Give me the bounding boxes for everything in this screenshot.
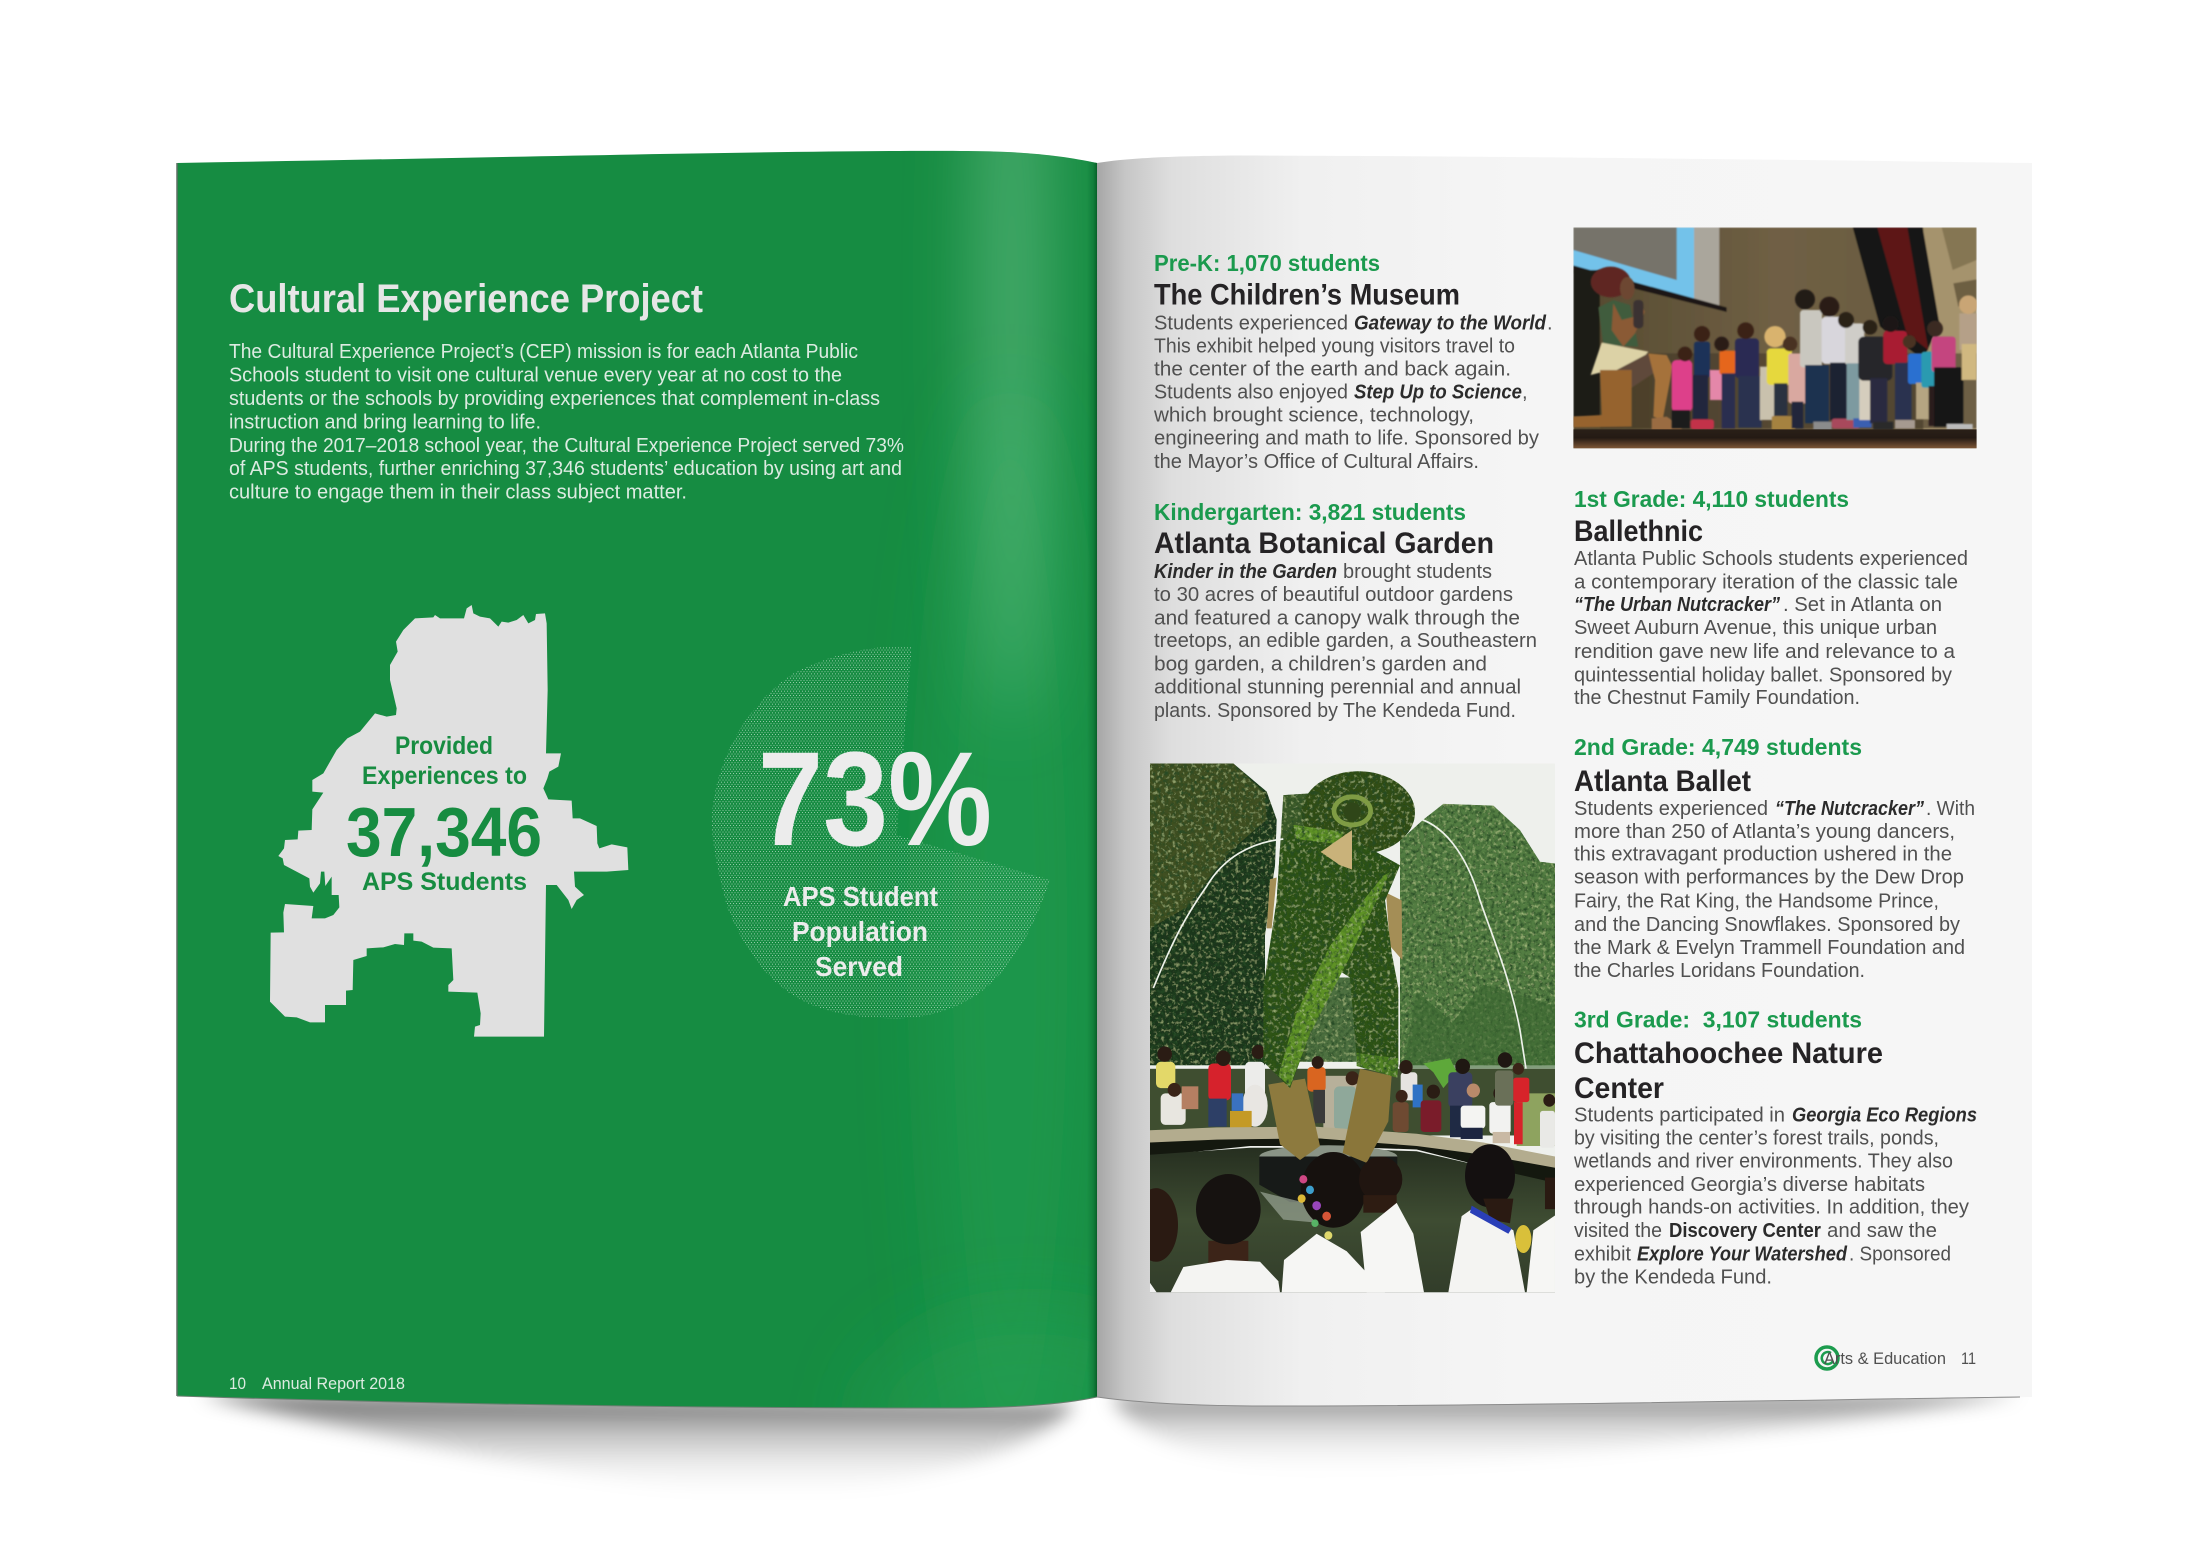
text block: mission intro: During the 2017–2018 school year, the Cultural Experience Project served 73%	[229, 435, 904, 457]
text block: 3rd Grade: by the Kendeda Fund.	[1574, 1266, 1772, 1288]
map label: Provided Experiences to	[362, 732, 527, 790]
text block: Kindergarten: brought students	[1343, 561, 1492, 583]
text block: 2nd Grade: Students experienced	[1574, 798, 1768, 820]
text block: mission intro: The Cultural Experience Project’s (CEP) mission is for each Atlanta Public	[229, 341, 858, 363]
pie label	[783, 881, 938, 982]
text block: 3rd Grade: experienced Georgia’s diverse habitats	[1574, 1174, 1925, 1196]
text block: 2nd Grade	[1574, 734, 1975, 982]
text block: Kindergarten: treetops, an edible garden, a Southeastern	[1154, 630, 1537, 652]
trees	[1150, 764, 1555, 1065]
text block: 2nd Grade: Fairy, the Rat King, the Handsome Prince,	[1574, 890, 1939, 912]
topiary sculpture	[1263, 771, 1415, 1163]
number: 37,346: 37,346	[346, 793, 542, 871]
text block: 2nd Grade: the Charles Loridans Foundation.	[1574, 960, 1865, 982]
text block: 3rd Grade: Explore Your Watershed	[1637, 1243, 1848, 1265]
text block: 1st Grade: Ballethnic	[1574, 515, 1703, 548]
footer: left page: 10	[229, 1374, 246, 1393]
text block: 1st Grade: quintessential holiday ballet. Sponsored by	[1574, 664, 1952, 686]
text block: Kindergarten: Atlanta Botanical Garden	[1154, 527, 1494, 560]
text block: 3rd Grade: Chattahoochee Nature	[1574, 1037, 1883, 1070]
woman presenter	[1573, 267, 1682, 431]
text block: Pre-K: engineering and math to life. Sponsored by	[1154, 428, 1539, 450]
text block: Kindergarten: to 30 acres of beautiful outdoor gardens	[1154, 584, 1513, 606]
pie label: Population	[792, 916, 928, 947]
text block: 2nd Grade: this extravagant production ushered in the	[1574, 844, 1952, 866]
pie label: Served	[815, 951, 903, 982]
text block: 3rd Grade: 3rd Grade: 3,107 students	[1574, 1006, 1862, 1032]
text block: Kindergarten: plants. Sponsored by The Kendeda Fund.	[1154, 700, 1516, 722]
text block: Kindergarten: Kindergarten: 3,821 students	[1154, 499, 1466, 525]
section name: Arts & Education	[1824, 1349, 1946, 1368]
text block: 1st Grade: “The Urban Nutcracker”	[1574, 594, 1780, 616]
fountain jets	[1153, 818, 1526, 1069]
text block: 2nd Grade: season with performances by the Dew Drop	[1574, 867, 1964, 889]
pie slice dots	[712, 646, 1050, 1018]
text block: 2nd Grade: 2nd Grade: 4,749 students	[1574, 734, 1862, 760]
text block: Pre-K: The Children’s Museum	[1154, 278, 1460, 312]
text block: 3rd Grade: . Sponsored	[1849, 1243, 1951, 1265]
text block: 1st Grade: 1st Grade: 4,110 students	[1574, 486, 1849, 512]
text block: 3rd Grade: through hands-on activities. In addition, they	[1574, 1196, 1969, 1218]
panel: left green page	[176, 150, 1097, 1408]
text block: Pre-K: the Mayor’s Office of Cultural Affairs.	[1154, 451, 1479, 473]
children row	[1672, 289, 1978, 431]
text block: 3rd Grade: exhibit	[1574, 1243, 1631, 1265]
text block: 2nd Grade: Atlanta Ballet	[1574, 765, 1751, 798]
text block: mission intro: instruction and bring learning to life.	[229, 412, 541, 434]
text block: Kindergarten: Kinder in the Garden	[1154, 561, 1337, 583]
panel: right white page	[1097, 156, 2032, 1406]
photo: children dancing on stage	[1573, 227, 1978, 448]
text block: Kindergarten	[1154, 499, 1537, 722]
map label: Provided Experiences to: Experiences to	[362, 762, 527, 790]
text block: 2nd Grade: “The Nutcracker”	[1775, 798, 1924, 820]
text block: mission intro: of APS students, further enriching 37,346 students’ education by using art and	[229, 458, 902, 480]
stage floor	[1573, 429, 1977, 448]
text block: Pre-K: which brought science, technology,	[1153, 404, 1474, 426]
text block: 1st Grade: . Set in Atlanta on	[1783, 594, 1942, 616]
footer: left page: Annual Report 2018	[262, 1374, 405, 1393]
text block: mission intro	[229, 341, 904, 504]
fountain rim and water	[1150, 1127, 1555, 1292]
page number: 11	[1961, 1349, 1976, 1368]
text block: Pre-K: This exhibit helped young visitors travel to	[1154, 336, 1515, 358]
text block: 3rd Grade: visited the	[1574, 1220, 1662, 1242]
text block: Pre-K: ,	[1522, 381, 1528, 403]
students foreground	[1134, 1144, 1555, 1292]
text block: Pre-K: Students also enjoyed	[1154, 381, 1348, 403]
text block: 3rd Grade: wetlands and river environments. They also	[1573, 1151, 1953, 1173]
text block: Pre-K: Pre-K: 1,070 students	[1154, 250, 1380, 276]
text block: 3rd Grade: Center	[1574, 1072, 1664, 1105]
text block: 1st Grade: Sweet Auburn Avenue, this unique urban	[1574, 617, 1937, 639]
text block: 3rd Grade: Discovery Center	[1669, 1220, 1821, 1242]
title: Cultural Experience Project	[229, 277, 703, 321]
text block: 1st Grade: a contemporary iteration of the classic tale	[1574, 572, 1958, 594]
text block: 1st Grade	[1574, 486, 1968, 709]
photo: topiary fountain with students	[1134, 764, 1555, 1292]
text block: Pre-K: Step Up to Science	[1354, 381, 1522, 403]
text block: 2nd Grade: more than 250 of Atlanta’s young dancers,	[1574, 821, 1955, 843]
text block: 1st Grade: the Chestnut Family Foundation.	[1574, 687, 1860, 709]
text block: Pre-K	[1153, 250, 1553, 473]
text block: Pre-K: Gateway to the World	[1354, 312, 1547, 334]
text block: 2nd Grade: . With	[1926, 798, 1975, 820]
text block: Kindergarten: additional stunning perennial and annual	[1154, 676, 1521, 698]
text block: Kindergarten: and featured a canopy walk through the	[1154, 608, 1520, 630]
text block: 3rd Grade: Georgia Eco Regions	[1792, 1105, 1977, 1127]
page shadows	[200, 1394, 2020, 1494]
chart: 73% dotted pie	[712, 646, 1050, 1018]
map label: APS Students: APS Students	[362, 868, 527, 896]
text block: Pre-K: the center of the earth and back again.	[1154, 359, 1511, 381]
text block: 3rd Grade	[1573, 1006, 1977, 1288]
text block: 2nd Grade: the Mark & Evelyn Trammell Foundation and	[1574, 937, 1965, 959]
text block: 3rd Grade: by visiting the center’s forest trails, ponds,	[1574, 1128, 1939, 1150]
text block: mission intro: Schools student to visit one cultural venue every year at no cost to the	[229, 364, 842, 386]
text block: mission intro: culture to engage them in their class subject matter.	[229, 482, 687, 504]
text block: Kindergarten: bog garden, a children’s garden and	[1154, 653, 1487, 675]
text block: 3rd Grade: Students participated in	[1574, 1105, 1785, 1127]
text block: mission intro: students or the schools by providing experiences that complement in-class	[229, 388, 880, 410]
district silhouette	[270, 605, 628, 1037]
map label: Provided Experiences to: Provided	[395, 732, 493, 760]
number: 73%: 73%	[758, 725, 992, 874]
text block: Pre-K: Students experienced	[1154, 312, 1348, 334]
text block: 3rd Grade: and saw the	[1827, 1220, 1937, 1242]
visitors band	[1150, 1045, 1555, 1148]
pie label: APS Student	[783, 881, 938, 912]
text block: 1st Grade: rendition gave new life and relevance to a	[1574, 641, 1956, 663]
text block: Pre-K: .	[1547, 312, 1553, 334]
map: Atlanta Public Schools district	[270, 605, 628, 1037]
icon: spiral logo	[1816, 1347, 1838, 1369]
text block: 2nd Grade: and the Dancing Snowflakes. Sponsored by	[1574, 914, 1960, 936]
footer: right page	[1816, 1347, 1976, 1369]
text block: 1st Grade: Atlanta Public Schools students experienced	[1574, 548, 1968, 570]
